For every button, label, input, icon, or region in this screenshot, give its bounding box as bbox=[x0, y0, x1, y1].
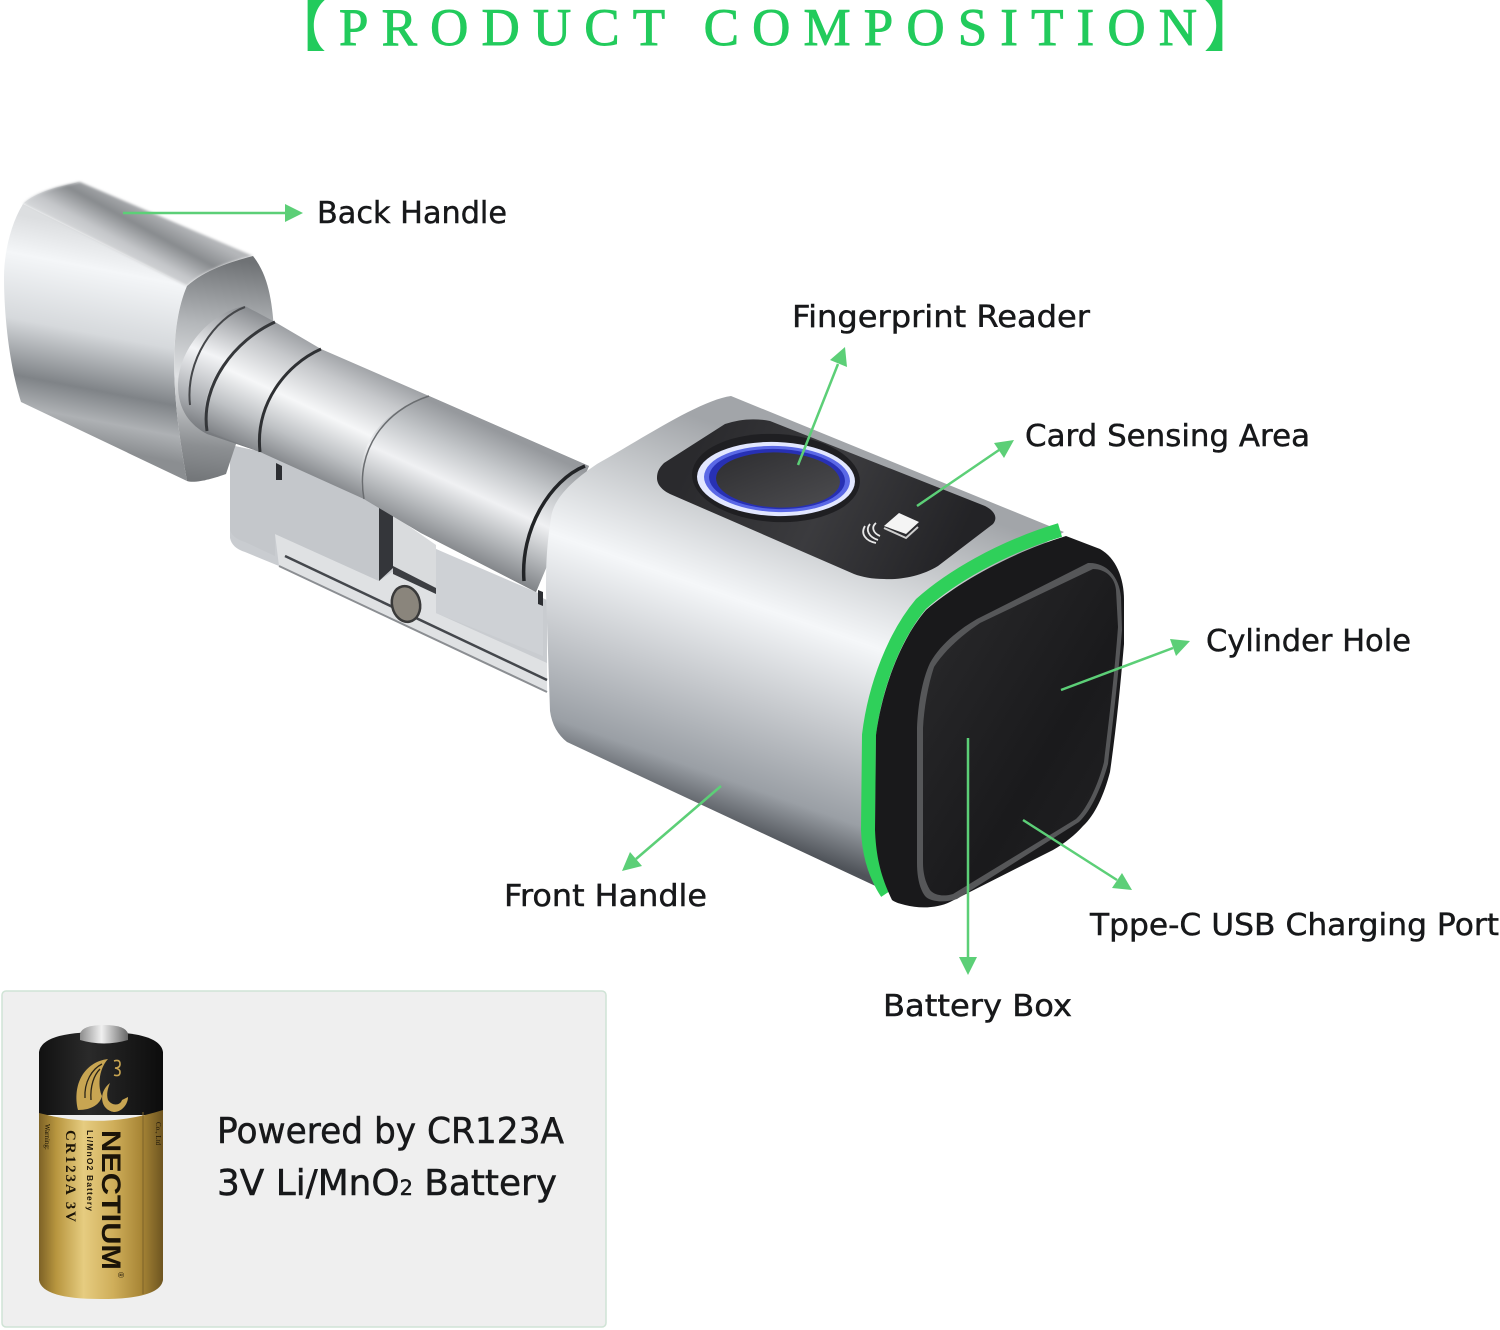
battery description bbox=[217, 1111, 564, 1204]
lock cylinder body bbox=[230, 445, 547, 692]
battery line 2: 3V Li/MnO2 Battery bbox=[217, 1163, 557, 1204]
panel: battery bbox=[2, 991, 606, 1327]
cylinder face bbox=[923, 569, 1118, 895]
label: usb charging port bbox=[1023, 820, 1499, 943]
arrow: fingerprint reader bbox=[798, 347, 847, 465]
arrow: back handle bbox=[123, 204, 303, 222]
arrow: usb charging port bbox=[1023, 820, 1132, 890]
label: back handle bbox=[123, 196, 507, 231]
label: cylinder hole bbox=[1061, 624, 1411, 690]
battery maker text: Co., Ltd bbox=[154, 1122, 162, 1146]
arrow: front handle bbox=[622, 786, 721, 871]
text: usb charging port: Tppe-C USB Charging Port bbox=[1089, 908, 1499, 943]
label: card sensing area bbox=[917, 419, 1310, 506]
back handle bbox=[4, 182, 274, 482]
shaft and collar bbox=[178, 306, 589, 592]
battery line 1: Powered by CR123A bbox=[217, 1111, 564, 1152]
title text: PRODUCT COMPOSITION bbox=[339, 0, 1197, 57]
text: card sensing area: Card Sensing Area bbox=[1025, 419, 1310, 454]
card sensing icon bbox=[863, 513, 919, 543]
icon: CR123A battery bbox=[39, 1025, 163, 1299]
label: front handle bbox=[504, 786, 721, 914]
title bbox=[272, 0, 1258, 58]
battery warning text: Warning: bbox=[43, 1124, 51, 1150]
black front rim bbox=[875, 536, 1124, 907]
battery registered mark: ® bbox=[116, 1272, 125, 1278]
text: battery box: Battery Box bbox=[883, 989, 1072, 1024]
green LED ring bbox=[868, 530, 1060, 893]
battery whale logo bbox=[76, 1059, 128, 1112]
arrow: card sensing area bbox=[917, 440, 1014, 506]
text: back handle: Back Handle bbox=[317, 196, 507, 231]
label: battery box bbox=[883, 738, 1072, 1024]
arrow: battery box bbox=[959, 738, 977, 975]
fingerprint reader bbox=[690, 430, 862, 526]
front handle body bbox=[546, 396, 1124, 907]
text: front handle: Front Handle bbox=[504, 879, 707, 914]
label: fingerprint reader bbox=[792, 300, 1091, 465]
battery model text: CR123A 3V bbox=[62, 1130, 78, 1222]
text: cylinder hole: Cylinder Hole bbox=[1206, 624, 1411, 659]
smart lock product illustration bbox=[4, 182, 1124, 907]
battery brand text: NECTIUM bbox=[96, 1130, 126, 1270]
arrow: cylinder hole bbox=[1061, 639, 1190, 690]
grey inner bezel bbox=[917, 563, 1122, 901]
battery chemistry text: Li/MnO2 Battery bbox=[85, 1130, 95, 1211]
top control panel bbox=[657, 419, 995, 579]
mounting screw hole bbox=[389, 583, 423, 625]
text: fingerprint reader: Fingerprint Reader bbox=[792, 300, 1091, 335]
